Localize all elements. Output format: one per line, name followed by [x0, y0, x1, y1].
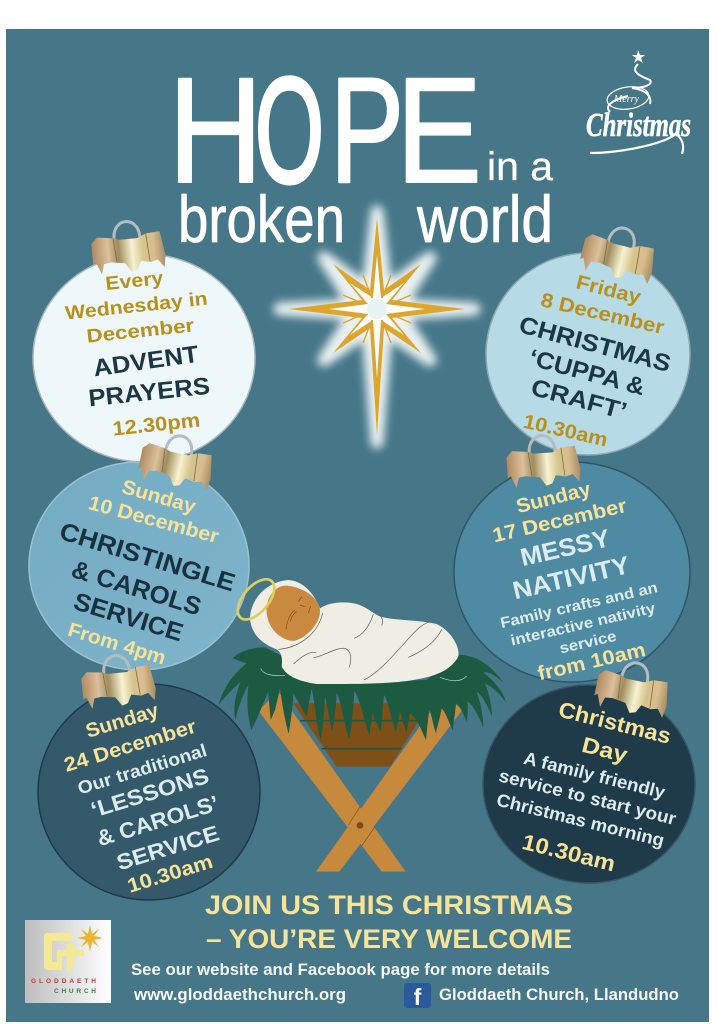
service name: PRAYERS	[87, 373, 211, 412]
ornament: Advent Prayers	[33, 218, 255, 462]
ornament: Messy Nativity	[454, 433, 690, 685]
date: Sunday	[83, 700, 162, 743]
date: Every	[104, 268, 165, 295]
service name: SERVICE	[113, 820, 222, 875]
date: 10 December	[86, 492, 221, 548]
manger legs	[258, 692, 406, 872]
manger trough	[293, 703, 430, 767]
ornament cap	[136, 429, 218, 493]
service name	[516, 312, 674, 425]
title: E	[396, 46, 482, 214]
service name: ADVENT	[92, 341, 201, 382]
text: more details: See our website and Facebook page for more details	[131, 961, 550, 979]
date	[64, 268, 209, 348]
hay	[218, 647, 506, 740]
service name: CHRISTMAS	[516, 312, 674, 378]
date: 17 December	[490, 495, 629, 547]
time: from 10am	[536, 639, 648, 685]
date: Christmas	[556, 697, 674, 749]
call to action heading	[205, 890, 573, 954]
description: A family friendly	[522, 748, 667, 802]
title: world	[416, 182, 553, 256]
title: in a	[487, 145, 554, 189]
baby blanket	[250, 580, 459, 684]
ornament: Christmas Day	[483, 656, 695, 883]
icon: facebook	[404, 983, 431, 1010]
date: Day	[579, 732, 631, 768]
service name: & CAROLS	[68, 555, 205, 621]
icon: facebook: f	[414, 984, 422, 1010]
description: Family crafts and an	[499, 579, 659, 632]
service name: NATIVITY	[510, 551, 633, 605]
date: Sunday	[119, 476, 199, 519]
service name	[510, 524, 633, 605]
service name	[88, 763, 222, 875]
title: O	[255, 46, 324, 214]
date	[538, 272, 666, 339]
icon: merry christmas tree lettering	[586, 50, 691, 154]
ornament cap	[592, 656, 674, 720]
time: From 4pm	[65, 619, 168, 670]
title: P	[330, 46, 404, 214]
description: service	[558, 628, 618, 657]
baby head	[267, 586, 320, 641]
halo	[231, 573, 281, 626]
date: Wednesday in	[64, 289, 209, 324]
date: 8 December	[538, 289, 666, 339]
service name: CHRISTINGLE	[56, 517, 238, 597]
description	[495, 748, 678, 851]
text: facebook page: Gloddaeth Church, Llandudno	[439, 986, 679, 1004]
description: service to start your	[497, 765, 678, 829]
date: Sunday	[514, 478, 594, 518]
service name: MESSY	[518, 524, 613, 572]
description	[499, 579, 659, 657]
ornament: Lessons and Carols	[38, 652, 260, 900]
logo: Gloddaeth Church: CHURCH	[54, 988, 96, 995]
title	[168, 46, 554, 256]
ornament: Christmas Cuppa and Craft	[486, 220, 690, 455]
time: 10.30am	[125, 851, 216, 898]
date	[62, 700, 199, 777]
date: 24 December	[62, 716, 199, 777]
date	[86, 476, 221, 548]
time: 10.30am	[520, 829, 618, 876]
service name	[56, 517, 238, 647]
service name: & CAROLS’	[94, 790, 222, 851]
ornament cap	[79, 652, 157, 710]
ornament cap	[90, 218, 167, 275]
time: 10.30am	[521, 411, 610, 452]
service name: ‘LESSONS	[88, 763, 212, 823]
date: Friday	[574, 272, 644, 309]
ornament cap	[578, 220, 661, 286]
date	[556, 697, 674, 768]
title: H	[168, 46, 263, 214]
description: interactive nativity	[509, 600, 658, 650]
date	[490, 478, 629, 547]
call to action heading: – YOU’RE VERY WELCOME	[206, 924, 572, 954]
service name	[87, 341, 211, 412]
description: Christmas morning	[495, 790, 666, 851]
illustration: baby in manger	[218, 573, 506, 872]
description: Our traditional	[75, 740, 209, 798]
date: December	[86, 315, 196, 348]
ornament: Christingle and Carols	[29, 429, 249, 670]
logo: Gloddaeth Church	[25, 920, 111, 1003]
icon: star of Bethlehem	[280, 212, 474, 442]
ornament cap	[505, 433, 581, 488]
call to action heading: JOIN US THIS CHRISTMAS	[205, 890, 573, 920]
service name: CRAFT’	[528, 374, 630, 425]
logo: Gloddaeth Church: GLODDAETH	[31, 978, 96, 985]
title: broken	[178, 182, 345, 256]
text: website: www.gloddaethchurch.org	[133, 986, 346, 1004]
icon: merry christmas tree lettering: Merry	[613, 93, 639, 105]
time: 12.30pm	[111, 409, 201, 441]
service name: ‘CUPPA &	[526, 344, 648, 401]
service name: SERVICE	[70, 587, 186, 647]
